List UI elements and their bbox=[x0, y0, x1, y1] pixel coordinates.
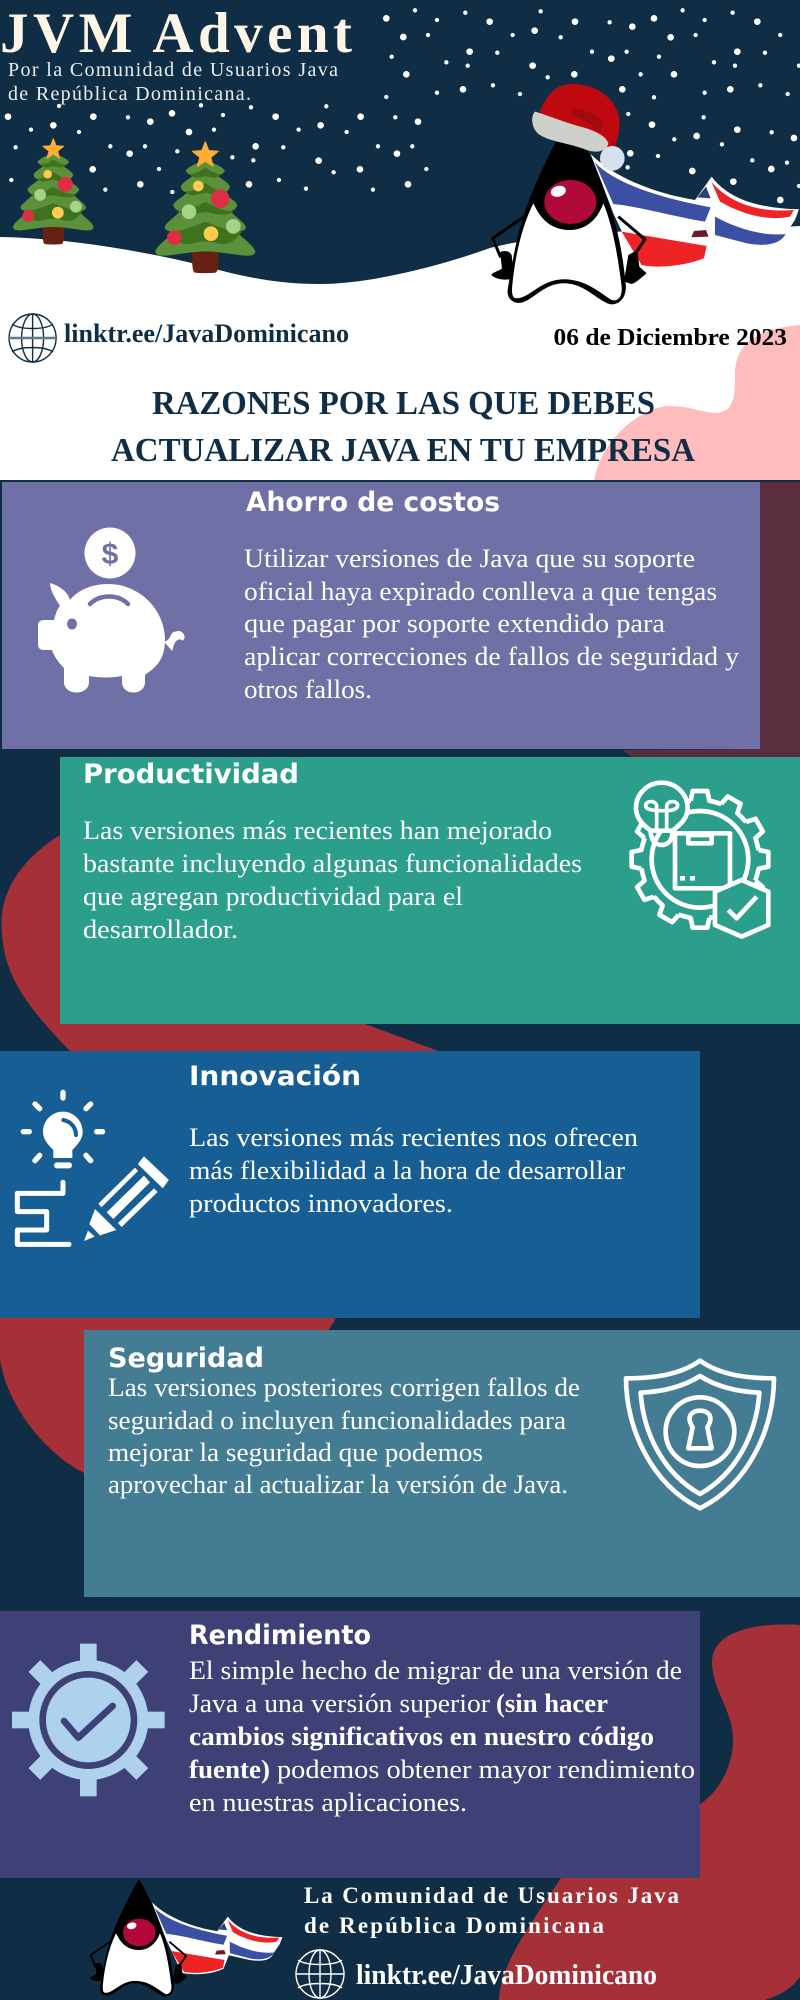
panel: Seguridad bbox=[84, 1330, 800, 1597]
footer: globe icon bbox=[296, 1950, 344, 1998]
body text bbox=[108, 1373, 580, 1499]
body text: mejorar la seguridad que podemos bbox=[108, 1438, 483, 1467]
body text: desarrollador. bbox=[83, 915, 238, 944]
body text: bastante incluyendo algunas funcionalidades bbox=[83, 849, 582, 878]
body text: Las versiones más recientes han mejorado bbox=[83, 816, 552, 845]
panel: Innovación bbox=[0, 1051, 700, 1318]
icon: gear with check mark bbox=[12, 1644, 165, 1796]
snowflakes bbox=[8, 10, 799, 200]
subtitle bbox=[8, 59, 338, 105]
panel background bbox=[60, 757, 800, 1024]
red decorative blob left upper bbox=[1, 810, 441, 1052]
heading: Innovación bbox=[189, 1061, 361, 1092]
icon: light bulb and pencil bbox=[17, 1092, 168, 1244]
body text: productos innovadores. bbox=[189, 1189, 453, 1218]
icon: piggy bank bbox=[38, 528, 184, 692]
globe icon bbox=[9, 314, 56, 362]
main heading bbox=[111, 385, 695, 469]
main heading: ACTUALIZAR JAVA EN TU EMPRESA bbox=[111, 432, 695, 469]
body text bbox=[244, 544, 739, 704]
body text: cambios significativos en nuestro código bbox=[189, 1722, 654, 1751]
body text: El simple hecho de migrar de una versión de bbox=[189, 1656, 682, 1685]
main heading: RAZONES POR LAS QUE DEBES bbox=[152, 385, 655, 422]
pink decorative blob behind headline bbox=[594, 325, 800, 482]
body text: más flexibilidad a la hora de desarrollar bbox=[189, 1156, 625, 1185]
body text: Las versiones más recientes nos ofrecen bbox=[189, 1123, 638, 1152]
body text: (sin hacer bbox=[496, 1689, 608, 1718]
body text bbox=[189, 1123, 638, 1218]
large christmas tree bbox=[155, 142, 255, 273]
santa hat bbox=[532, 84, 625, 171]
panel background bbox=[0, 1051, 700, 1318]
mauve decorative blob beside first panel bbox=[594, 482, 800, 757]
date: 06 de Diciembre 2023 bbox=[554, 325, 787, 351]
panel background bbox=[0, 1611, 700, 1878]
icon: shield with keyhole bbox=[626, 1361, 774, 1508]
body text: seguridad o incluyen funcionalidades para bbox=[108, 1406, 566, 1435]
sky bbox=[0, 0, 800, 290]
body text: Utilizar versiones de Java que su soporte bbox=[244, 544, 695, 573]
body text bbox=[83, 816, 582, 944]
icon: piggy bank: $ bbox=[102, 538, 119, 571]
heading: Rendimiento bbox=[189, 1620, 371, 1651]
heading: Seguridad bbox=[108, 1343, 264, 1374]
footer: community text: La Comunidad de Usuarios Java bbox=[304, 1883, 680, 1908]
heading: Ahorro de costos bbox=[246, 487, 500, 518]
page background: white upper area bbox=[0, 0, 800, 480]
body text: otros fallos. bbox=[244, 675, 372, 704]
subtitle: de República Dominicana. bbox=[8, 83, 251, 105]
snow ground bbox=[0, 226, 800, 300]
panel: Rendimiento bbox=[0, 1611, 700, 1878]
footer: community text bbox=[304, 1883, 680, 1938]
title: JVM Advent bbox=[0, 2, 352, 65]
panel: Ahorro de costos bbox=[2, 482, 760, 749]
panel background bbox=[84, 1330, 800, 1597]
body text: en nuestras aplicaciones. bbox=[189, 1788, 467, 1817]
night sky header bbox=[0, 0, 800, 290]
small christmas tree bbox=[13, 139, 94, 244]
body text: oficial haya expirado conlleva a que tengas bbox=[244, 577, 717, 606]
body text: aprovechar al actualizar la versión de Java. bbox=[108, 1470, 568, 1499]
red decorative blob right bbox=[499, 1624, 800, 2000]
panel background bbox=[2, 482, 760, 749]
panel: Productividad bbox=[60, 757, 800, 1024]
footer: link text: linktr.ee/JavaDominicano bbox=[356, 1960, 657, 1991]
body text: podemos obtener mayor rendimiento bbox=[277, 1755, 695, 1784]
body text: Las versiones posteriores corrigen fallos de bbox=[108, 1373, 580, 1402]
body text bbox=[189, 1656, 695, 1817]
icon: gear, bulb, box and shield bbox=[630, 783, 770, 937]
link text: linktr.ee/JavaDominicano bbox=[64, 319, 349, 348]
body text: fuente) bbox=[189, 1755, 270, 1784]
dark lower background bbox=[0, 480, 800, 2000]
footer: Duke mascot with flag bbox=[90, 1879, 282, 1997]
body text: aplicar correcciones de fallos de seguridad y bbox=[244, 642, 739, 671]
footer: community text: de República Dominicana bbox=[304, 1913, 604, 1938]
subtitle: Por la Comunidad de Usuarios Java bbox=[8, 59, 338, 81]
body text: Java a una versión superior bbox=[189, 1689, 490, 1718]
Duke mascot with Santa hat and Dominican flag bbox=[491, 84, 799, 304]
body text: que pagar por soporte extendido para bbox=[244, 609, 665, 638]
heading: Productividad bbox=[83, 759, 299, 790]
red decorative blob left lower bbox=[0, 1318, 336, 1473]
body text: que agregan productividad para el bbox=[83, 882, 463, 911]
